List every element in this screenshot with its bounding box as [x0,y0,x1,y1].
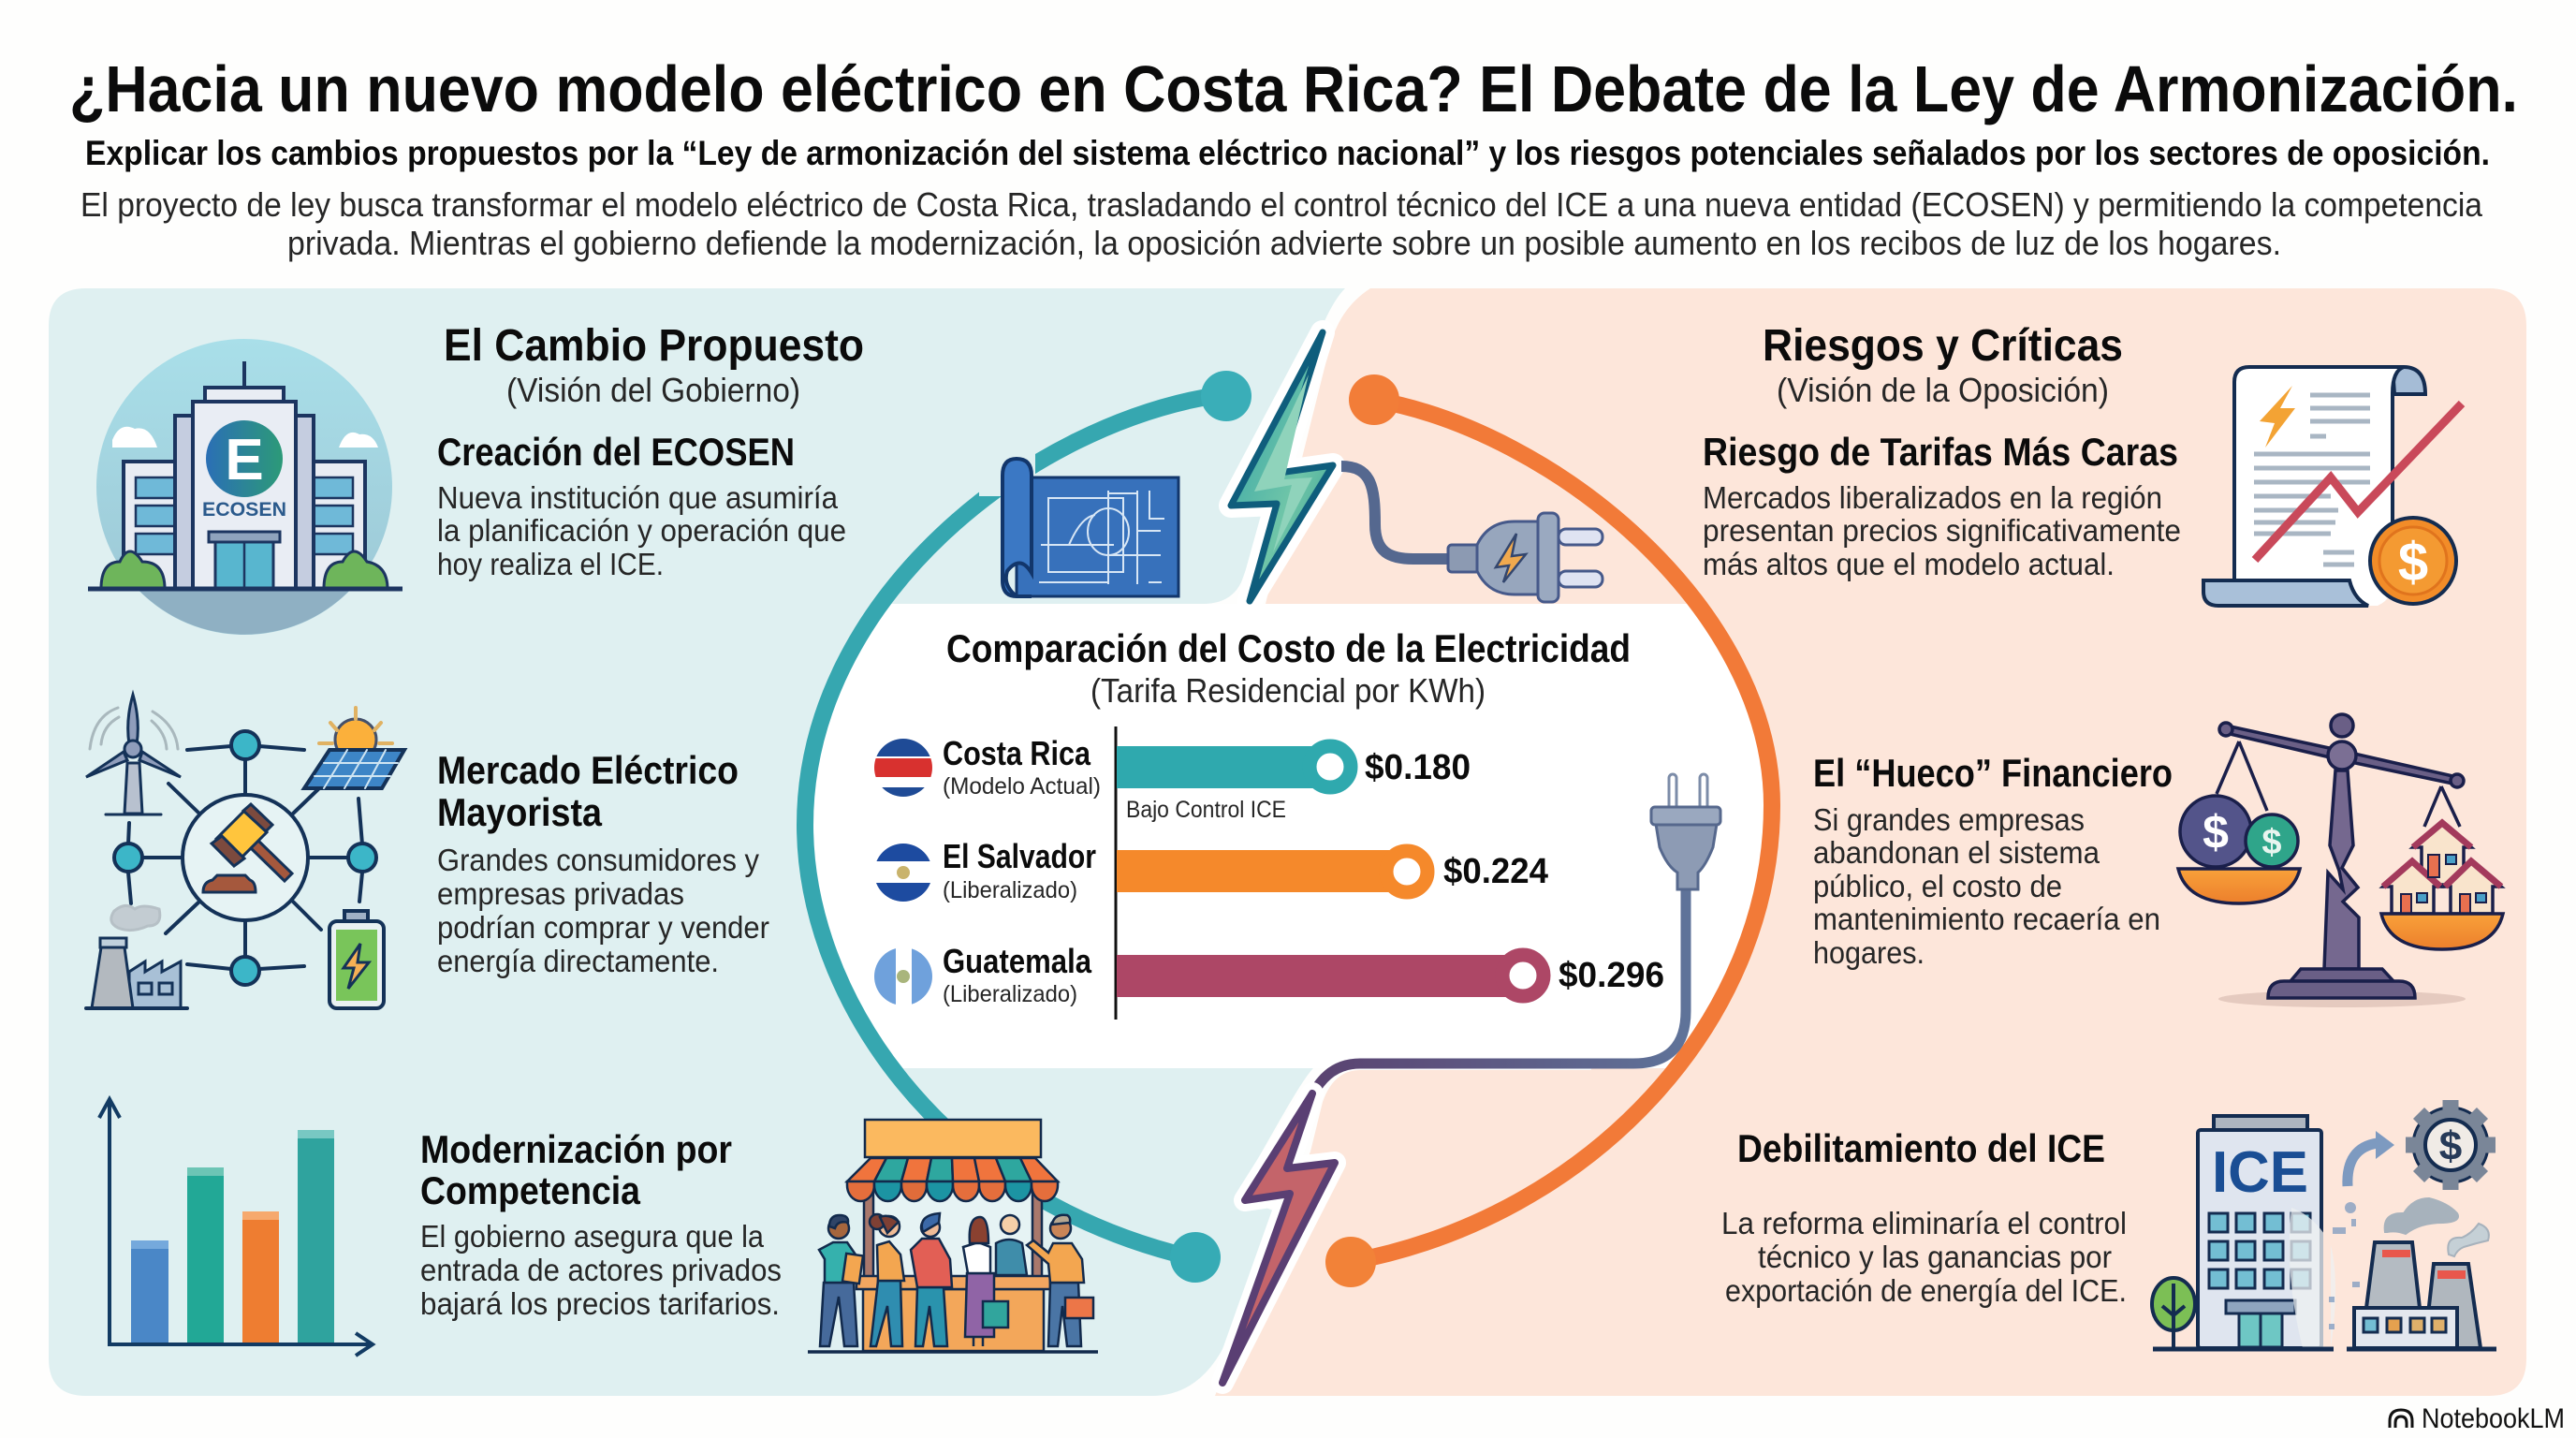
text block: Debilitamiento del ICE: exportación de energía del ICE. [1725,1273,2127,1308]
text block: Mercado Eléctrico Mayorista: Grandes consumidores y [437,843,759,877]
text block: Modernización por Competencia: Modernización por [420,1127,732,1171]
awning [847,1158,1058,1201]
icon: cord and vertical plug [1313,774,1720,1093]
text block: Mercado Eléctrico Mayorista: Mercado Eléctrico [437,748,739,792]
intro text: privada. Mientras el gobierno defiende la modernización, la oposición advierte sobre un posible aumento en los recibos de luz de los hogares. [287,224,2281,262]
panel: center white comparison area [813,604,1764,1068]
text block: Mercado Eléctrico Mayorista: energía directamente. [437,944,719,978]
text block: Modernización por Competencia: bajará los precios tarifarios. [420,1286,780,1321]
icon: teal lightning bolt [1231,332,1333,601]
icon: electricity bill with rising arrow [2203,367,2462,606]
text block: Riesgo de Tarifas Más Caras: Riesgo de Tarifas Más Caras [1703,430,2178,474]
text block: Riesgo de Tarifas Más Caras [1703,430,2181,581]
row: El Salvador [943,837,1548,903]
icon: cracked balance scale [2178,714,2503,1007]
icon: electricity bill with rising arrow: $ [2398,532,2428,593]
text block: Modernización por Competencia: Competencia [420,1168,641,1212]
chart: cost comparison [871,626,1664,1020]
chart title: Comparación del Costo de la Electricidad [946,626,1631,670]
text block: Riesgo de Tarifas Más Caras: Mercados liberalizados en la región [1703,480,2162,515]
heading note: Visión de la Oposición: (Visión de la Oposición) [1777,371,2109,409]
icon: cracked balance scale: $ [2203,806,2229,858]
text block: Riesgo de Tarifas Más Caras: presentan precios significativamente [1703,513,2181,548]
row: Costa Rica: $0.180 [1365,748,1471,787]
text block: El Hueco Financiero: Si grandes empresas [1813,802,2085,837]
icon: bar chart [99,1099,373,1356]
orange arc [1325,374,1772,1287]
text block: Modernización por Competencia [420,1127,782,1321]
row: Costa Rica: (Modelo Actual) [943,773,1101,800]
text block: El Hueco Financiero: público, el costo de [1813,869,2062,903]
text block: El Hueco Financiero: El “Hueco” Financiero [1813,751,2173,795]
text block: Debilitamiento del ICE: técnico y las ganancias por [1758,1240,2112,1274]
text block: Mercado Eléctrico Mayorista [437,748,769,978]
person 5: clerk [996,1215,1027,1275]
text block: Mercado Eléctrico Mayorista: podrían comprar y vender [437,910,769,945]
person 3 [911,1213,952,1346]
icon: ECOSEN building [88,339,402,635]
solar panel [304,708,404,788]
text block: El Hueco Financiero: hogares. [1813,935,1925,970]
row: Costa Rica [943,734,1471,823]
text block: Creación del ECOSEN: Creación del ECOSEN [437,430,795,474]
row: Guatemala: $0.296 [1559,956,1664,995]
row: El Salvador: $0.224 [1443,852,1548,891]
icon: market stall with people [808,1120,1098,1352]
icon: flag Guatemala [874,948,932,1005]
battery [329,911,384,1008]
icon: blueprint [979,440,1178,596]
chart axis [1114,726,1118,1020]
icon: ICE building and factory: ICE [2212,1140,2308,1205]
row: Costa Rica: Bajo Control ICE [1126,797,1286,823]
wind turbine [86,695,181,814]
panel: right background [1215,288,2526,1396]
row: El Salvador: El Salvador [943,837,1096,875]
row: El Salvador: (Liberalizado) [943,877,1077,903]
network nodes [114,731,376,985]
text block: Debilitamiento del ICE: La reforma eliminaría el control [1721,1206,2127,1240]
person 4 [963,1217,1008,1346]
heading note: Visión del Gobierno: (Visión del Gobierno) [506,371,800,409]
network links [128,746,362,969]
chart subtitle: (Tarifa Residencial por KWh) [1090,671,1486,710]
factory [86,905,187,1008]
text block: Riesgo de Tarifas Más Caras: más altos que el modelo actual. [1703,547,2115,581]
person 2 [870,1214,904,1346]
text block: Creación del ECOSEN: la planificación y operación que [437,513,846,548]
icon: flag El Salvador [876,844,930,902]
intro text [80,185,2483,262]
text block: Creación del ECOSEN: hoy realiza el ICE. [437,547,664,581]
text block: Creación del ECOSEN [437,430,846,581]
text block: Mercado Eléctrico Mayorista: Mayorista [437,790,603,834]
icon: energy market network [86,695,404,1008]
text block: Creación del ECOSEN: Nueva institución que asumiría [437,480,839,515]
row: Guatemala: Guatemala [943,942,1092,980]
text block: Mercado Eléctrico Mayorista: empresas privadas [437,876,684,911]
person 1 [819,1215,863,1346]
icon: flag Costa Rica [874,739,932,797]
heading: Riesgos y Críticas: Riesgos y Críticas [1763,321,2123,371]
text block: Modernización por Competencia: entrada de actores privados [420,1253,782,1287]
icon: purple lightning bolt [1222,1093,1335,1383]
person 6 [1027,1215,1093,1346]
text block: Modernización por Competencia: El gobierno asegura que la [420,1219,765,1254]
gavel [203,804,292,892]
icon: cracked balance scale: $ [2261,823,2282,862]
heading: El Cambio Propuesto: El Cambio Propuesto [444,321,864,371]
text block: El Hueco Financiero [1813,751,2173,970]
panel: left background [49,288,1345,1396]
hub circle [183,795,308,920]
text block: El Hueco Financiero: abandonan el sistema [1813,835,2100,870]
row: Guatemala [943,942,1664,1007]
teal arc [805,371,1251,1283]
text block: Debilitamiento del ICE [1721,1126,2127,1308]
icon: ICE building and factory: $ [2439,1123,2462,1169]
icon: ICE building and factory [2152,1100,2496,1353]
icon: ECOSEN building: E [225,428,264,492]
row: Guatemala: (Liberalizado) [943,981,1077,1007]
text block: El Hueco Financiero: mantenimiento recaería en [1813,902,2160,936]
row: Costa Rica: Costa Rica [943,734,1091,772]
icon: plug with cord top [1341,466,1603,602]
icon: ECOSEN building: ECOSEN [202,499,286,521]
text block: Debilitamiento del ICE: Debilitamiento del ICE [1737,1126,2105,1170]
